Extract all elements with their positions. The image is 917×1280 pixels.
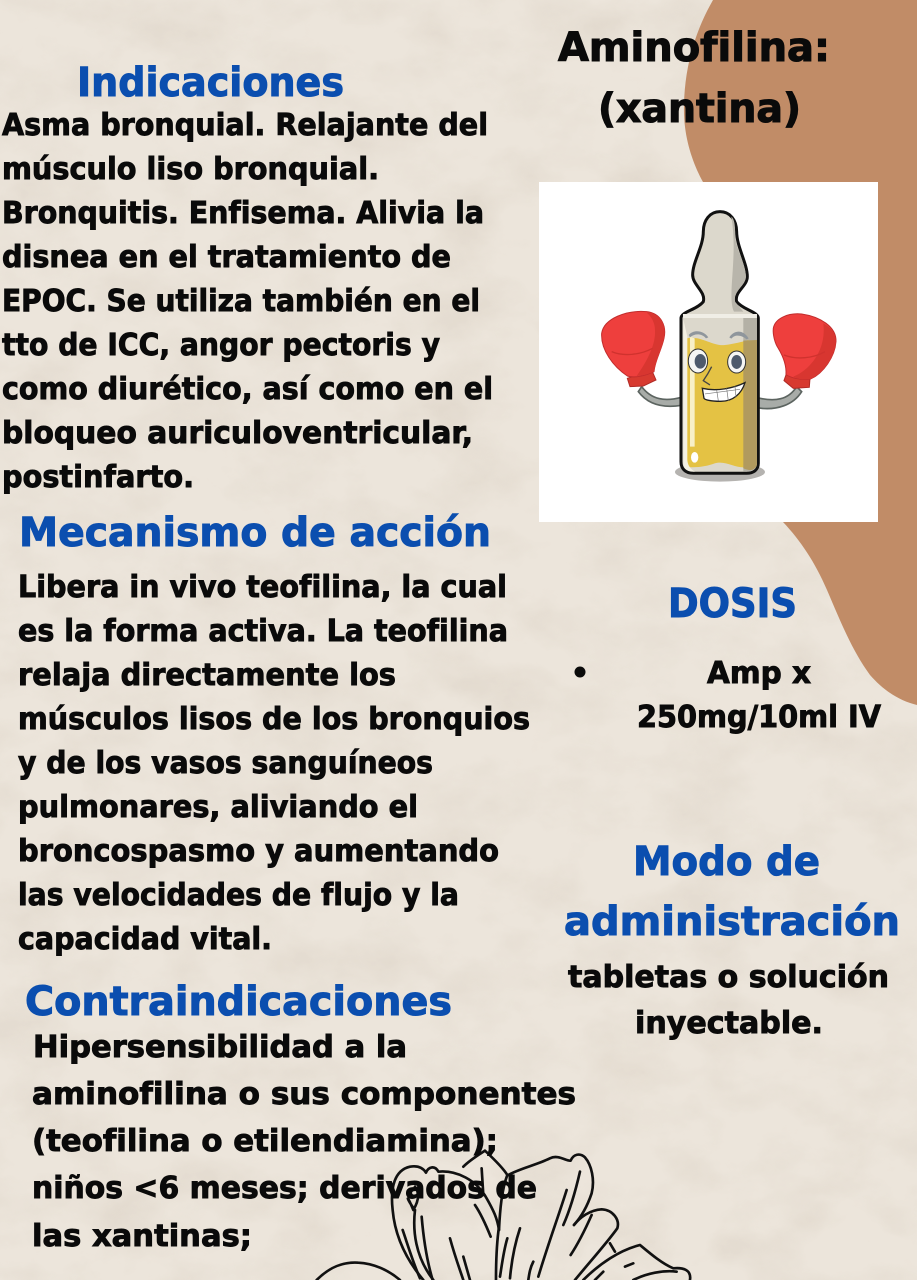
text block: modo de administración: [568, 960, 889, 1041]
heading: Indicaciones: Indicaciones: [77, 60, 344, 106]
text block: mecanismo: Libera in vivo teofilina, la cual: [18, 570, 507, 605]
title: [558, 25, 830, 132]
text block: indicaciones: EPOC. Se utiliza también en el: [2, 284, 480, 319]
text block: contraindicaciones: niños <6 meses; derivados de: [32, 1171, 537, 1206]
text block: mecanismo: pulmonares, aliviando el: [18, 790, 418, 825]
text block: dosis: 250mg/10ml IV: [637, 700, 882, 735]
heading: Modo de administración: [564, 839, 900, 945]
text block: contraindicaciones: las xantinas;: [32, 1219, 252, 1254]
text block: contraindicaciones: Hipersensibilidad a la: [33, 1030, 407, 1065]
text block: indicaciones: Bronquitis. Enfisema. Alivia la: [2, 196, 484, 231]
panel: ampoule image: [539, 182, 878, 522]
text block: mecanismo: las velocidades de flujo y la: [18, 878, 459, 913]
text block: mecanismo: y de los vasos sanguíneos: [18, 746, 433, 781]
text block: contraindicaciones: [32, 1030, 576, 1254]
text block: dosis: [637, 656, 882, 735]
heading: Modo de administración: administración: [564, 899, 900, 945]
bullet: [574, 666, 586, 678]
text block: indicaciones: [2, 108, 493, 495]
text block: mecanismo: relaja directamente los: [18, 658, 396, 693]
title: (xantina): [598, 86, 801, 132]
text block: indicaciones: como diurético, así como en el: [2, 372, 493, 407]
text block: modo de administración: tabletas o solución: [568, 960, 889, 995]
title: Aminofilina:: [558, 25, 830, 71]
icon: flower line drawing: [317, 1151, 690, 1280]
text block: indicaciones: Asma bronquial. Relajante del: [2, 108, 488, 143]
heading: Modo de administración: Modo de: [633, 839, 820, 885]
text block: mecanismo: capacidad vital.: [18, 922, 272, 957]
text block: indicaciones: postinfarto.: [2, 460, 194, 495]
text block: mecanismo: es la forma activa. La teofilina: [18, 614, 508, 649]
text block: mecanismo: [18, 570, 530, 957]
text block: mecanismo: broncospasmo y aumentando: [18, 834, 499, 869]
heading: Contraindicaciones: Contraindicaciones: [25, 979, 452, 1025]
text block: mecanismo: músculos lisos de los bronquios: [18, 702, 530, 737]
text block: indicaciones: tto de ICC, angor pectoris y: [2, 328, 440, 363]
text block: dosis: Amp x: [707, 656, 811, 691]
heading: Mecanismo de acción: Mecanismo de acción: [19, 510, 491, 556]
text block: contraindicaciones: (teofilina o etilendiamina);: [32, 1124, 498, 1159]
brown blob shape: [684, 0, 917, 705]
text block: indicaciones: disnea en el tratamiento de: [2, 240, 451, 275]
text block: indicaciones: músculo liso bronquial.: [2, 152, 379, 187]
text block: indicaciones: bloqueo auriculoventricular,: [2, 416, 473, 451]
icon: ampoule boxer: [602, 212, 836, 482]
heading: DOSIS: DOSIS: [668, 581, 797, 627]
text block: contraindicaciones: aminofilina o sus componentes: [32, 1077, 576, 1112]
text block: modo de administración: inyectable.: [635, 1006, 823, 1041]
